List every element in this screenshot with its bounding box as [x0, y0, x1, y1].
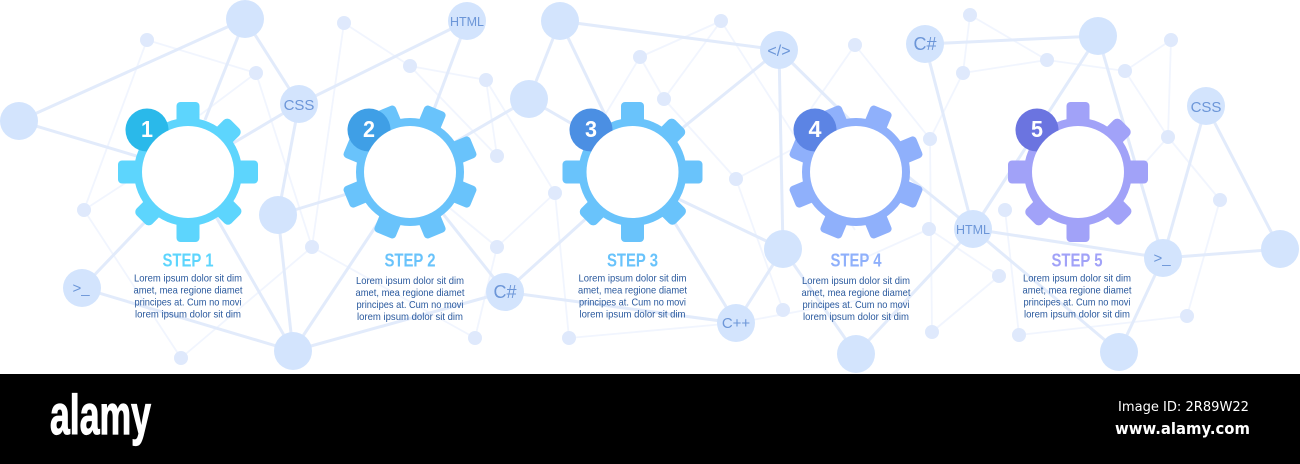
- gear 4: [767, 83, 945, 261]
- step 3 text: principes at. Cum no movi: [579, 296, 686, 308]
- step 3 text: [578, 272, 687, 320]
- step 4 text: [802, 275, 911, 323]
- step 2 text: [356, 275, 465, 323]
- step 4 text: principes at. Cum no movi: [802, 299, 910, 311]
- step 5 heading: STEP 5: [1052, 250, 1102, 270]
- watermark footer band: [0, 374, 1300, 464]
- gear 3: 3: [585, 116, 597, 142]
- step 3: [562, 102, 702, 320]
- node labels: HTML: [450, 15, 484, 29]
- step 3 text: Lorem ipsum dolor sit dim: [578, 272, 687, 284]
- step 2 text: principes at. Cum no movi: [356, 299, 464, 311]
- node labels: >_: [72, 280, 90, 297]
- step 2 text: amet, mea regione diamet: [356, 287, 465, 299]
- step 1 text: lorem ipsum dolor sit dim: [135, 308, 241, 320]
- step 2 text: lorem ipsum dolor sit dim: [357, 311, 463, 323]
- gear 5: 5: [1031, 116, 1043, 142]
- step 4 text: amet, mea regione diamet: [802, 287, 911, 299]
- gear 1: 1: [141, 116, 153, 142]
- step 2: [321, 83, 499, 323]
- node labels: HTML: [956, 223, 990, 237]
- step 5 text: Lorem ipsum dolor sit dim: [1023, 272, 1131, 284]
- step 5 text: amet, mea regione diamet: [1022, 284, 1132, 296]
- node labels: C#: [493, 282, 517, 302]
- step 4 text: Lorem ipsum dolor sit dim: [802, 275, 910, 287]
- step 4: [767, 83, 945, 323]
- website: www.alamy.com: [1115, 419, 1250, 438]
- alamy logo: alamy: [50, 383, 151, 446]
- step 1 text: [134, 272, 243, 320]
- node labels: C#: [913, 34, 937, 54]
- step 3 text: amet, mea regione diamet: [578, 284, 687, 296]
- step 3 text: lorem ipsum dolor sit dim: [580, 308, 686, 320]
- step 2 text: Lorem ipsum dolor sit dim: [356, 275, 464, 287]
- step 5 text: principes at. Cum no movi: [1024, 296, 1130, 308]
- step 5 text: [1022, 272, 1132, 320]
- gear 3: [562, 102, 702, 242]
- step 1 text: amet, mea regione diamet: [134, 284, 243, 296]
- node labels: CSS: [284, 97, 314, 114]
- step 4 heading: STEP 4: [830, 250, 882, 270]
- gear 1: [118, 102, 258, 242]
- step 1: [118, 102, 258, 320]
- image id: Image ID: 2R89W22: [1118, 400, 1249, 415]
- node labels: C++: [722, 315, 750, 332]
- step 1 text: principes at. Cum no movi: [134, 296, 242, 308]
- node labels: >_: [1153, 250, 1171, 267]
- gear 5: [1008, 102, 1148, 242]
- step 1 heading: STEP 1: [162, 250, 214, 270]
- step 4 text: lorem ipsum dolor sit dim: [803, 311, 909, 323]
- gear 4: 4: [808, 116, 822, 142]
- step 5: [1008, 102, 1148, 320]
- step 1 text: Lorem ipsum dolor sit dim: [134, 272, 242, 284]
- node labels: CSS: [1191, 99, 1221, 116]
- step 3 heading: STEP 3: [607, 250, 658, 270]
- node labels: </>: [767, 43, 791, 60]
- step 5 text: lorem ipsum dolor sit dim: [1024, 308, 1130, 320]
- node labels: [72, 15, 1221, 332]
- gear 2: 2: [363, 116, 375, 142]
- gear 2: [321, 83, 499, 261]
- step 2 heading: STEP 2: [384, 250, 436, 270]
